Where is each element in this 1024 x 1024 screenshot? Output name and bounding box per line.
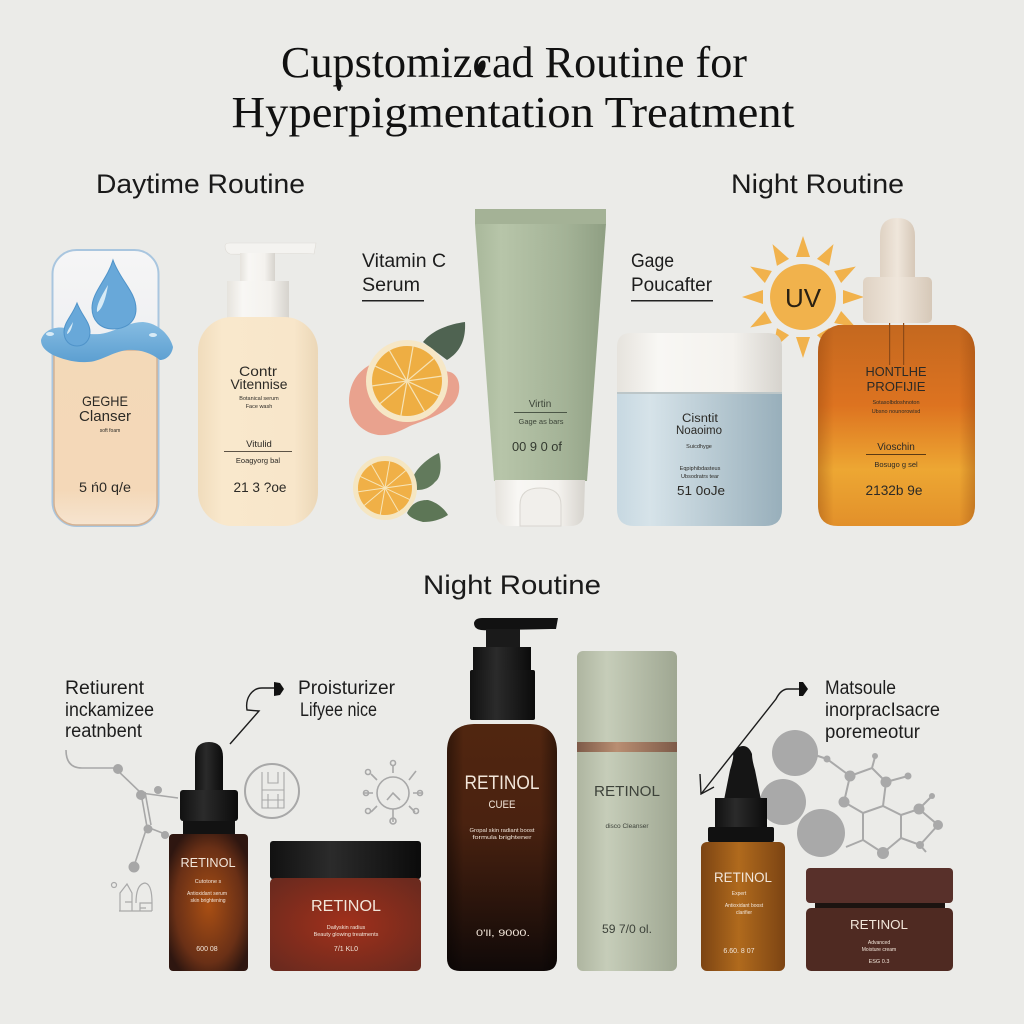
- product: brown dropper bottle: Antioxidant serum: [187, 891, 227, 897]
- icon: left molecule: [66, 750, 178, 872]
- icon: uv sun: UV: [785, 283, 822, 313]
- label: retiurent: [65, 678, 154, 742]
- heading: daytime routine: Daytime Routine: [96, 169, 305, 199]
- product: white and blue jar: Cisntit: [682, 413, 719, 425]
- product: olive bottle: disco Cleanser: [606, 823, 649, 830]
- product: amber dropper serum: 2132b 9e: [866, 483, 922, 498]
- label: matsoule: inorpracIsacre: [825, 700, 940, 721]
- product: red jar: Beauty glowing treatments: [314, 932, 379, 938]
- title: [232, 38, 794, 137]
- product: amber dropper serum: [818, 218, 975, 526]
- product: brown dropper bottle: skin brightening: [190, 898, 226, 904]
- product: cleanser with water: GEGHE: [82, 393, 128, 409]
- product: pump bottle: Face wash: [246, 404, 272, 410]
- icon: water splash: [41, 322, 173, 362]
- product: brown dropper bottle: 600 08: [196, 946, 218, 953]
- label: gage poucafter: Poucafter: [631, 275, 713, 296]
- product: pump bottle: Contr: [239, 363, 277, 379]
- product: white and blue jar: 51 0oJe: [677, 483, 725, 498]
- icon: virus ring: [364, 760, 422, 824]
- product: red jar: Dailyskin radius: [327, 925, 366, 931]
- product: olive bottle: [577, 651, 677, 971]
- label: vitamin c serum: [362, 251, 446, 302]
- product: large brown pump bottle: CUEE: [488, 799, 516, 811]
- label: retiurent: reatnbent: [65, 721, 143, 742]
- product: olive bottle: 59 7/0 ol.: [602, 922, 652, 936]
- icon: small orange slice: [353, 453, 448, 522]
- product: olive bottle: RETINOL: [594, 783, 660, 800]
- product: pump bottle: Botanical serum: [239, 396, 279, 402]
- product: amber dropper serum: Bosugo g sel: [874, 460, 918, 469]
- product: large brown pump bottle: Gropal skin radiant boost: [470, 828, 535, 834]
- product: brown dropper bottle: [169, 742, 248, 971]
- product: cleanser with water: soft foam: [100, 428, 120, 434]
- product: large brown pump bottle: 0'll, 9000.: [476, 928, 530, 939]
- product: white and blue jar: [617, 333, 782, 526]
- product: pump bottle: [198, 243, 318, 526]
- product: green tube: [475, 209, 606, 526]
- icon: circle with flasks: [245, 764, 299, 818]
- arrow: to proisturizer: [230, 682, 284, 744]
- label: proisturizer: [298, 678, 396, 721]
- product: red jar: [270, 841, 421, 971]
- product: amber dropper bottle: RETINOL: [714, 869, 772, 885]
- product: amber dropper serum: Ubsno nounorowisd: [872, 409, 920, 415]
- product: brown jar: Moisture cream: [862, 947, 896, 953]
- product: amber dropper bottle: clarifier: [736, 910, 752, 916]
- label: proisturizer: Lifyee nice: [300, 700, 377, 721]
- product: amber dropper serum: PROFIJIE: [866, 379, 926, 394]
- label: matsoule: poremeotur: [825, 722, 921, 743]
- product: large brown pump bottle: formula brightener: [472, 835, 532, 841]
- icon: lab glassware left: [112, 882, 152, 911]
- product: white and blue jar: Eqpiphibdasteus: [680, 466, 721, 472]
- product: amber dropper serum: Sotasolbdoshnoton: [872, 400, 920, 406]
- product: pump bottle: Eoagyorg bal: [236, 456, 280, 465]
- product: amber dropper bottle: Expert: [732, 891, 747, 897]
- product: brown jar: ESG 0.3: [869, 959, 889, 965]
- label: gage poucafter: [631, 251, 713, 302]
- product: white and blue jar: Noaoimo: [676, 425, 722, 437]
- product: pump bottle: 21 3 ?oe: [234, 479, 287, 495]
- label: retiurent: inckamizee: [65, 700, 154, 721]
- product: cleanser with water: 5 ń0 q/e: [79, 479, 131, 495]
- product: amber dropper bottle: [701, 746, 785, 971]
- product: amber dropper serum: HONTLHE: [866, 364, 927, 379]
- icon: uv sun: [742, 236, 864, 358]
- label: vitamin c serum: Vitamin C: [362, 251, 446, 272]
- product: white and blue jar: Suicdhyge: [686, 444, 712, 450]
- product: green tube: Virtin: [529, 399, 551, 410]
- icon: large water drop: [92, 260, 136, 329]
- label: proisturizer: Proisturizer: [298, 678, 396, 699]
- label: retiurent: Retiurent: [65, 678, 145, 699]
- label: matsoule: [825, 678, 940, 743]
- product: amber dropper serum: Vioschin: [877, 442, 915, 453]
- product: green tube: Gage as bars: [518, 417, 564, 426]
- product: red jar: RETINOL: [311, 898, 381, 915]
- icon: small water drop: [64, 303, 90, 346]
- product: cleanser with water: Clanser: [79, 408, 131, 425]
- icon: right molecule and spheres: [760, 730, 943, 859]
- title: Cupstomizcad Routine for: [281, 38, 747, 87]
- heading: night routine centre: Night Routine: [423, 570, 601, 600]
- product: cleanser with water: [41, 250, 173, 526]
- product: green tube: 00 9 0 of: [512, 439, 562, 454]
- product: large brown pump bottle: RETINOL: [464, 773, 540, 794]
- label: vitamin c serum: Serum: [362, 275, 420, 296]
- label: gage poucafter: Gage: [631, 251, 674, 272]
- product: red jar: 7/1 KL0: [334, 946, 358, 953]
- product: brown jar: RETINOL: [850, 918, 908, 932]
- label: matsoule: Matsoule: [825, 678, 896, 699]
- product: pump bottle: Vitulid: [246, 439, 272, 450]
- product: brown jar: Advanced: [868, 940, 890, 946]
- icon: large orange slice: [349, 322, 465, 435]
- product: amber dropper bottle: Antioxidant boost: [725, 903, 764, 909]
- product: brown dropper bottle: RETINOL: [180, 855, 236, 870]
- title: Hyperpigmentation Treatment: [232, 88, 794, 137]
- product: pump bottle: Vitennise: [230, 377, 288, 392]
- product: brown dropper bottle: Cutotone s: [195, 879, 222, 885]
- product: amber dropper bottle: 6.60. 8 07: [723, 948, 755, 955]
- heading: night routine top: Night Routine: [731, 169, 904, 199]
- product: white and blue jar: Ubsodratrs tear: [681, 474, 719, 480]
- product: brown jar: [806, 868, 953, 971]
- product: large brown pump bottle: [447, 618, 558, 971]
- arrow: to dropper: [700, 682, 808, 794]
